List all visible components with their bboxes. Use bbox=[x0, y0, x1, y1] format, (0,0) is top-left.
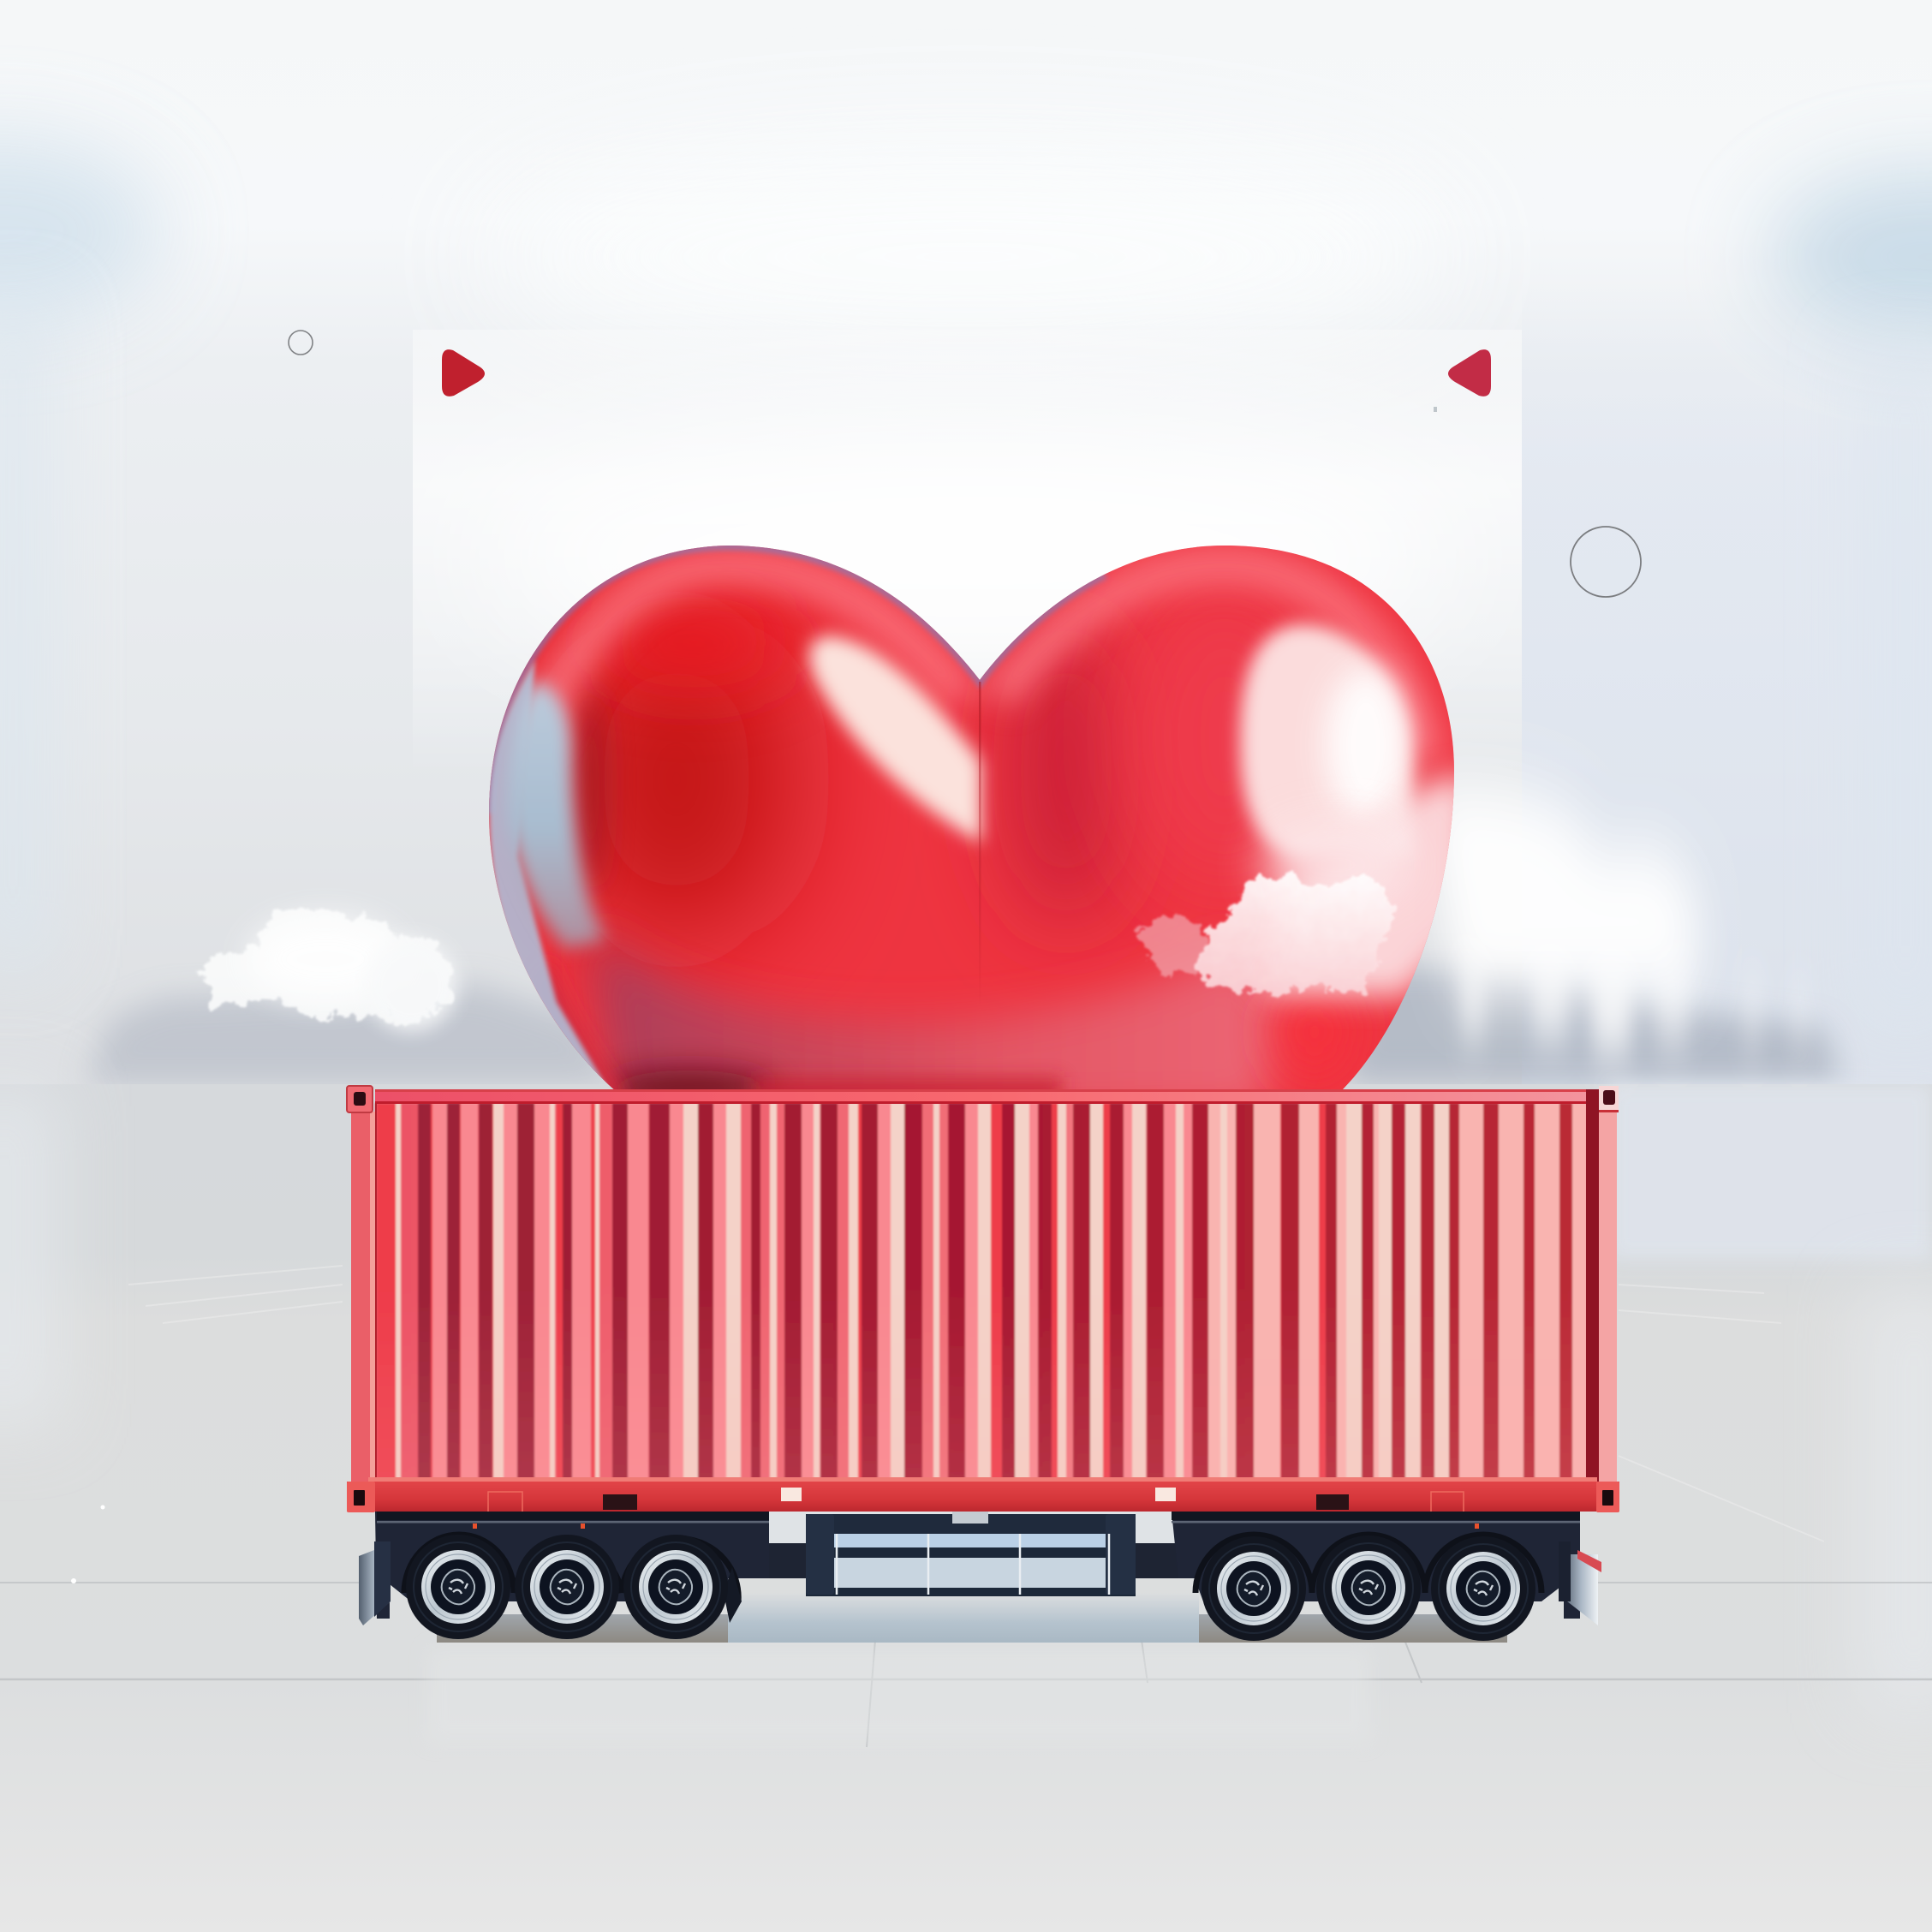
icon: right red triangle bbox=[1448, 349, 1491, 397]
cloud: pale haze over heart bbox=[1259, 775, 1473, 998]
sky: faint central square panel bbox=[413, 330, 1522, 775]
chassis: right mudflap bbox=[1564, 1554, 1598, 1625]
container: bottom rail bbox=[347, 1477, 1619, 1512]
icon: large outlined circle bbox=[1571, 527, 1641, 597]
chassis: right wheel ground shadow bbox=[1199, 1614, 1507, 1643]
chassis: centre floor shadow bbox=[728, 1593, 1199, 1643]
chassis: wheel 6 bbox=[1431, 1536, 1535, 1641]
chassis: centre storage box bbox=[806, 1512, 1136, 1596]
heart: lower matte reflection bbox=[574, 932, 1290, 1089]
icon: small outlined circle bbox=[289, 331, 313, 355]
heart: left lobe highlight bbox=[809, 635, 981, 844]
trailer chassis bbox=[359, 1512, 1601, 1643]
heart bbox=[480, 540, 1473, 1113]
background: distant treeline haze bbox=[86, 968, 1841, 1084]
background: misty sky bbox=[0, 0, 1932, 1105]
container: bright red left ribs bbox=[377, 1103, 1326, 1480]
chassis: left frame bbox=[375, 1512, 769, 1619]
container: medium pink ribs bbox=[432, 1103, 1192, 1480]
chassis: wheel arches bbox=[404, 1535, 1541, 1601]
cloud: left bbox=[195, 908, 458, 1032]
heart: top sheen bbox=[535, 565, 1430, 762]
sky: right blue tint bbox=[1522, 283, 1932, 1088]
container: corrugated panel bbox=[375, 1103, 1591, 1480]
container: left corner post bbox=[347, 1086, 377, 1483]
chassis: left wheel ground shadow bbox=[437, 1614, 728, 1643]
chassis: wheel 1 bbox=[406, 1535, 510, 1639]
shipping container bbox=[347, 1086, 1619, 1512]
chassis: wheel 3 bbox=[623, 1535, 728, 1639]
chassis: wheel 2 bbox=[515, 1535, 619, 1639]
container: highlight ribs bbox=[396, 1103, 1449, 1480]
chassis: cross beam bbox=[758, 1543, 1190, 1578]
heart: blue rim bbox=[489, 546, 1105, 814]
icon: left red triangle bbox=[442, 349, 485, 397]
heart: base colour bbox=[480, 540, 1464, 1096]
container: dark ribs bbox=[418, 1103, 1572, 1480]
ground plane bbox=[0, 1084, 1932, 1932]
cloud: right behind heart bbox=[1422, 784, 1809, 1053]
container: right corner post bbox=[1586, 1086, 1619, 1482]
cloud: fluffy puff on heart bbox=[1141, 874, 1396, 995]
chassis: right frame bbox=[1172, 1512, 1580, 1619]
chassis: gap behind centre box bbox=[769, 1512, 1178, 1546]
heart: centre seam bbox=[979, 682, 981, 956]
chassis: wheel 5 bbox=[1316, 1535, 1421, 1640]
chassis: left mudflap bbox=[359, 1550, 391, 1625]
heart: blue left-edge reflection bbox=[489, 659, 617, 1105]
container: top rail bbox=[375, 1089, 1591, 1104]
container: pale pink ribs bbox=[1208, 1103, 1586, 1480]
chassis: wheel 4 bbox=[1202, 1536, 1306, 1641]
heart: right lobe highlight bbox=[1240, 624, 1413, 861]
